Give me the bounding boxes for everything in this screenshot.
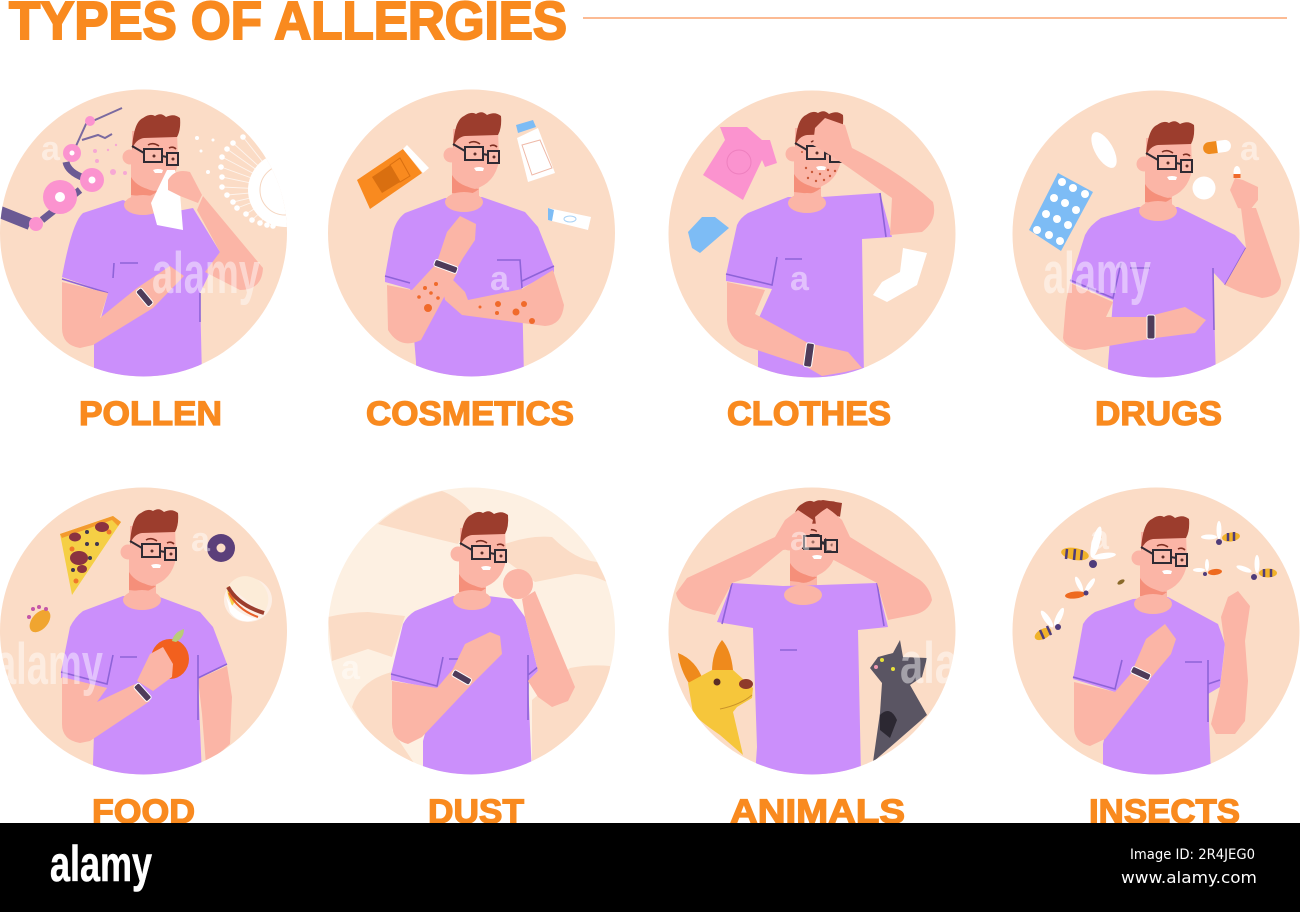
label: INSECTS — [1089, 793, 1240, 831]
figure: man taking pills: a — [1240, 130, 1260, 168]
icon: orange cosmetics box — [357, 145, 429, 209]
panel: drugs — [1012, 90, 1300, 433]
watermark: alamy — [152, 241, 260, 306]
label: FOOD — [92, 793, 195, 831]
figure: man with dog and cat: a — [790, 520, 810, 558]
figure: man sneezing: a — [41, 130, 61, 168]
alamy logo: alamy — [50, 836, 152, 892]
icon: round pill — [1192, 176, 1216, 200]
watermark: ala — [900, 631, 959, 696]
watermark: a — [490, 260, 510, 298]
label: ANIMALS — [730, 793, 905, 831]
right arm raised — [815, 507, 932, 620]
figure: man coughing in dust — [328, 491, 610, 776]
panel: pollen — [0, 90, 287, 426]
left arm raised — [676, 510, 813, 615]
hair between hands — [814, 500, 842, 517]
figure: man with insects — [1033, 515, 1277, 776]
watermark: alamy — [1043, 241, 1151, 306]
watermark: a — [790, 260, 810, 298]
icon: pizza — [60, 516, 121, 595]
icon: tube — [548, 208, 591, 230]
icon: cat — [870, 640, 927, 762]
figure: man with food — [0, 509, 272, 776]
icon: burger — [224, 576, 272, 622]
panel: cosmetics — [328, 90, 615, 433]
glasses — [804, 536, 837, 552]
panel: dust — [328, 488, 615, 831]
icon: blue hat — [688, 217, 729, 253]
label: DRUGS — [1095, 395, 1222, 433]
icon: bottle — [516, 120, 555, 182]
footer band — [0, 823, 1300, 912]
icon: white sock — [873, 248, 927, 302]
icon: pink t-shirt — [703, 127, 777, 200]
icon: candy — [27, 605, 50, 632]
icon: oval pill — [1091, 132, 1117, 168]
icon: blister pack — [1029, 173, 1093, 251]
watermark: a — [341, 649, 361, 687]
label: CLOTHES — [727, 395, 891, 433]
sun with pollen rays — [195, 134, 287, 229]
icon: apple — [151, 629, 189, 679]
panel: food — [0, 488, 287, 831]
figure: man with skin rash — [357, 112, 591, 377]
label: DUST — [428, 793, 524, 831]
label: POLLEN — [79, 395, 222, 433]
label: COSMETICS — [366, 395, 574, 433]
panel: clothes — [668, 90, 956, 433]
bees — [1033, 521, 1277, 643]
icon: capsule — [1202, 139, 1232, 155]
website: www.alamy.com — [1121, 868, 1257, 887]
figure: man sneezing — [0, 107, 287, 376]
icon: donut — [207, 534, 235, 562]
watermark: a — [1090, 519, 1110, 557]
icon: dog — [678, 640, 753, 755]
panel: insects — [1012, 488, 1300, 831]
figure: man taking pills — [1029, 121, 1281, 378]
panel: animals — [668, 488, 959, 831]
figure: man with dog and cat — [676, 500, 959, 776]
figure: man with food: a — [191, 521, 211, 559]
image id: Image ID: 2R4JEG0 — [1130, 847, 1255, 863]
figure: man with face rash — [688, 111, 934, 378]
